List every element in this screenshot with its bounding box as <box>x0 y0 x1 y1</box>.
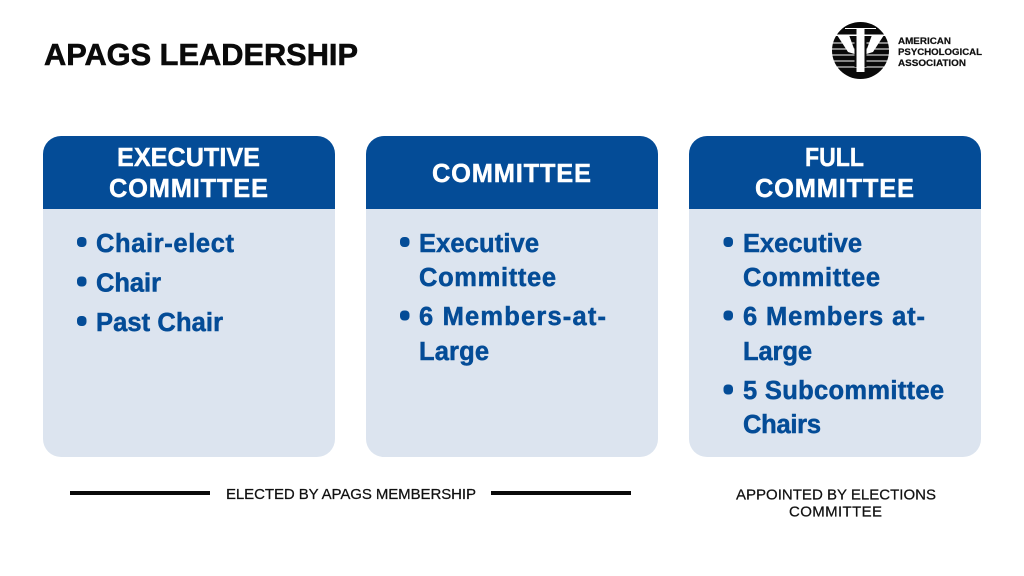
panel: full committee <box>689 136 981 457</box>
panel header: executive committee: EXECUTIVE <box>117 144 260 172</box>
panel header: executive committee: COMMITTEE <box>109 175 268 203</box>
list: executive committee members: Chair <box>96 270 161 298</box>
panel header: full committee: COMMITTEE <box>755 175 914 203</box>
list: executive committee members: Chair-elect <box>96 230 234 258</box>
icon: psi in striped circle <box>832 22 889 79</box>
list: full committee members: 5 Subcommittee <box>743 377 944 405</box>
panel: committee <box>366 136 658 457</box>
list: committee members: Large <box>419 338 489 366</box>
caption: appointed by elections committee <box>736 486 936 520</box>
panel: executive committee <box>43 136 335 457</box>
logo: American Psychological Association <box>832 22 983 79</box>
caption: appointed by elections committee: APPOINTED BY ELECTIONS <box>736 486 936 504</box>
panel header: full committee: FULL <box>805 144 864 172</box>
caption: elected by APAGS membership: ELECTED BY APAGS MEMBERSHIP <box>226 486 476 503</box>
list: full committee members: Chairs <box>743 411 821 439</box>
title: APAGS LEADERSHIP <box>44 37 358 72</box>
list: committee members: 6 Members-at- <box>419 303 606 331</box>
list: full committee members <box>724 230 944 439</box>
panel header: committee <box>366 136 658 209</box>
list: committee members: Committee <box>419 264 556 292</box>
list: full committee members: Executive <box>743 230 862 258</box>
list: full committee members: 6 Members at- <box>743 303 925 331</box>
panel header: executive committee <box>43 136 335 209</box>
list: committee members: Executive <box>419 230 539 258</box>
list: full committee members: Committee <box>743 264 880 292</box>
list: committee members <box>400 230 606 366</box>
panel header: committee: COMMITTEE <box>432 160 591 188</box>
logo wordmark: AMERICAN <box>898 36 951 46</box>
panel header: full committee <box>689 136 981 209</box>
list: executive committee members <box>77 230 234 337</box>
logo wordmark: ASSOCIATION <box>898 58 966 68</box>
caption: appointed by elections committee: COMMITTEE <box>789 504 882 520</box>
logo wordmark: PSYCHOLOGICAL <box>898 47 983 57</box>
list: executive committee members: Past Chair <box>96 309 223 337</box>
logo wordmark <box>898 36 983 68</box>
caption: elected by APAGS membership <box>70 486 631 503</box>
list: full committee members: Large <box>743 338 812 366</box>
